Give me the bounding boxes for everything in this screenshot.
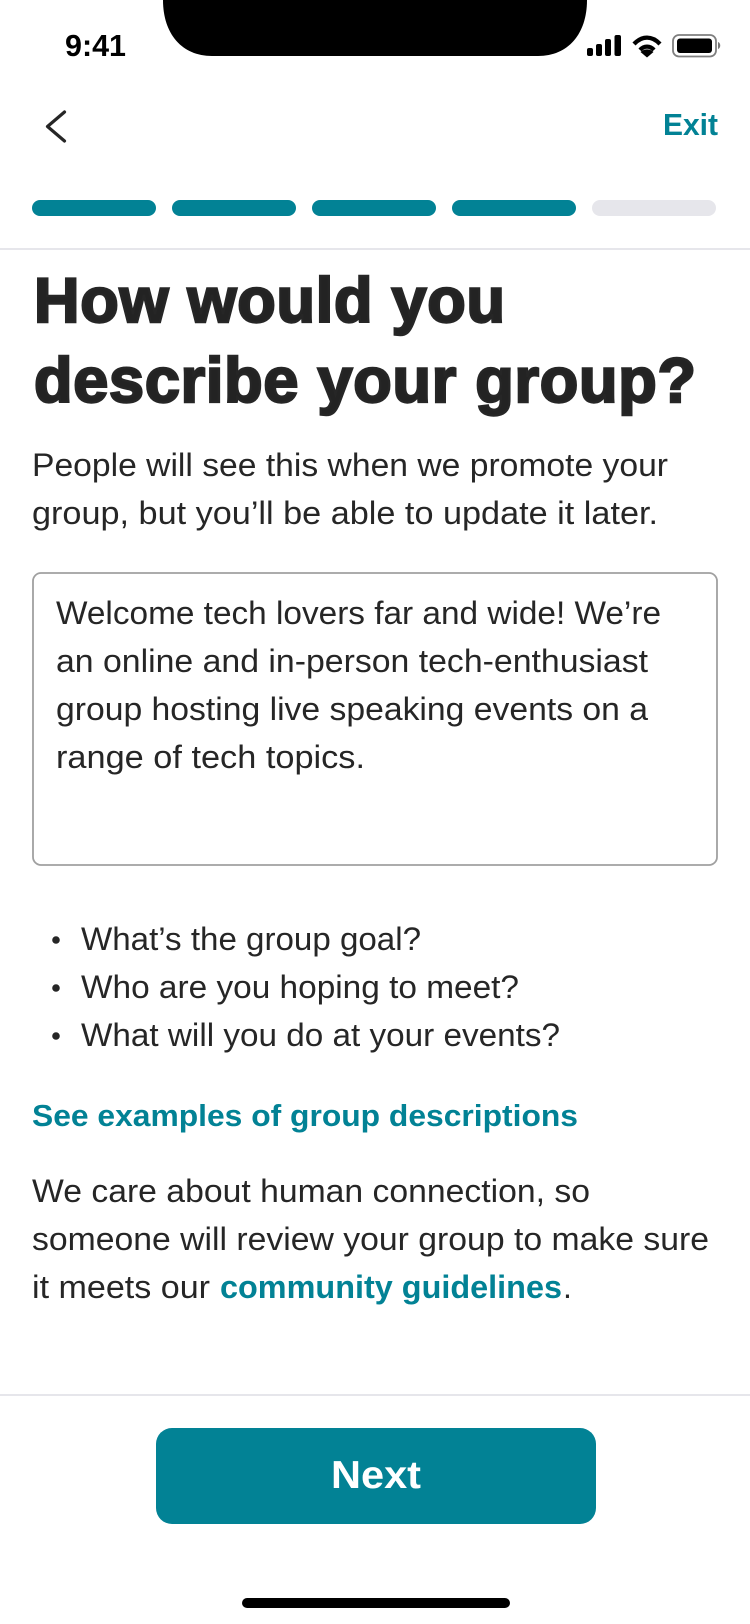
review note: someone will review your group to make sure xyxy=(32,1221,709,1257)
device notch xyxy=(163,0,587,56)
navigation bar xyxy=(48,107,718,142)
intro text: People will see this when we promote your xyxy=(32,447,668,483)
icon: wifi xyxy=(634,38,660,58)
intro text xyxy=(32,447,668,531)
intro text: group, but you’ll be able to update it later. xyxy=(32,495,658,531)
description text xyxy=(56,595,661,775)
review note: We care about human connection, so xyxy=(32,1173,590,1209)
clock: 9:41 xyxy=(65,28,126,63)
status bar xyxy=(65,0,720,63)
prompt list: What will you do at your events? xyxy=(81,1017,560,1053)
icon: signal strength xyxy=(587,35,621,56)
prompt list: Who are you hoping to meet? xyxy=(81,969,519,1005)
bottom action bar xyxy=(0,1394,750,1608)
description text: group hosting live speaking events on a xyxy=(56,691,648,727)
next button: Next xyxy=(331,1454,421,1497)
home indicator xyxy=(242,1598,510,1608)
review note: . xyxy=(563,1269,572,1305)
description text: an online and in-person tech-enthusiast xyxy=(56,643,648,679)
exit link: Exit xyxy=(663,107,718,142)
examples link: See examples of group descriptions xyxy=(32,1099,578,1133)
prompt list: What’s the group goal? xyxy=(81,921,421,957)
review note xyxy=(32,1173,709,1305)
icon: back chevron xyxy=(48,112,64,141)
description text: range of tech topics. xyxy=(56,739,365,775)
prompt list xyxy=(52,921,560,1053)
description text: Welcome tech lovers far and wide! We’re xyxy=(56,595,661,631)
icon: battery xyxy=(673,35,720,56)
progress bar: step 4 of 5 xyxy=(32,200,716,216)
title xyxy=(34,266,696,416)
title: describe your group? xyxy=(34,346,696,416)
review note: it meets our xyxy=(32,1269,210,1305)
community guidelines link: community guidelines xyxy=(220,1269,562,1305)
title: How would you xyxy=(34,266,505,336)
next button xyxy=(156,1428,596,1524)
description text box xyxy=(33,573,717,865)
